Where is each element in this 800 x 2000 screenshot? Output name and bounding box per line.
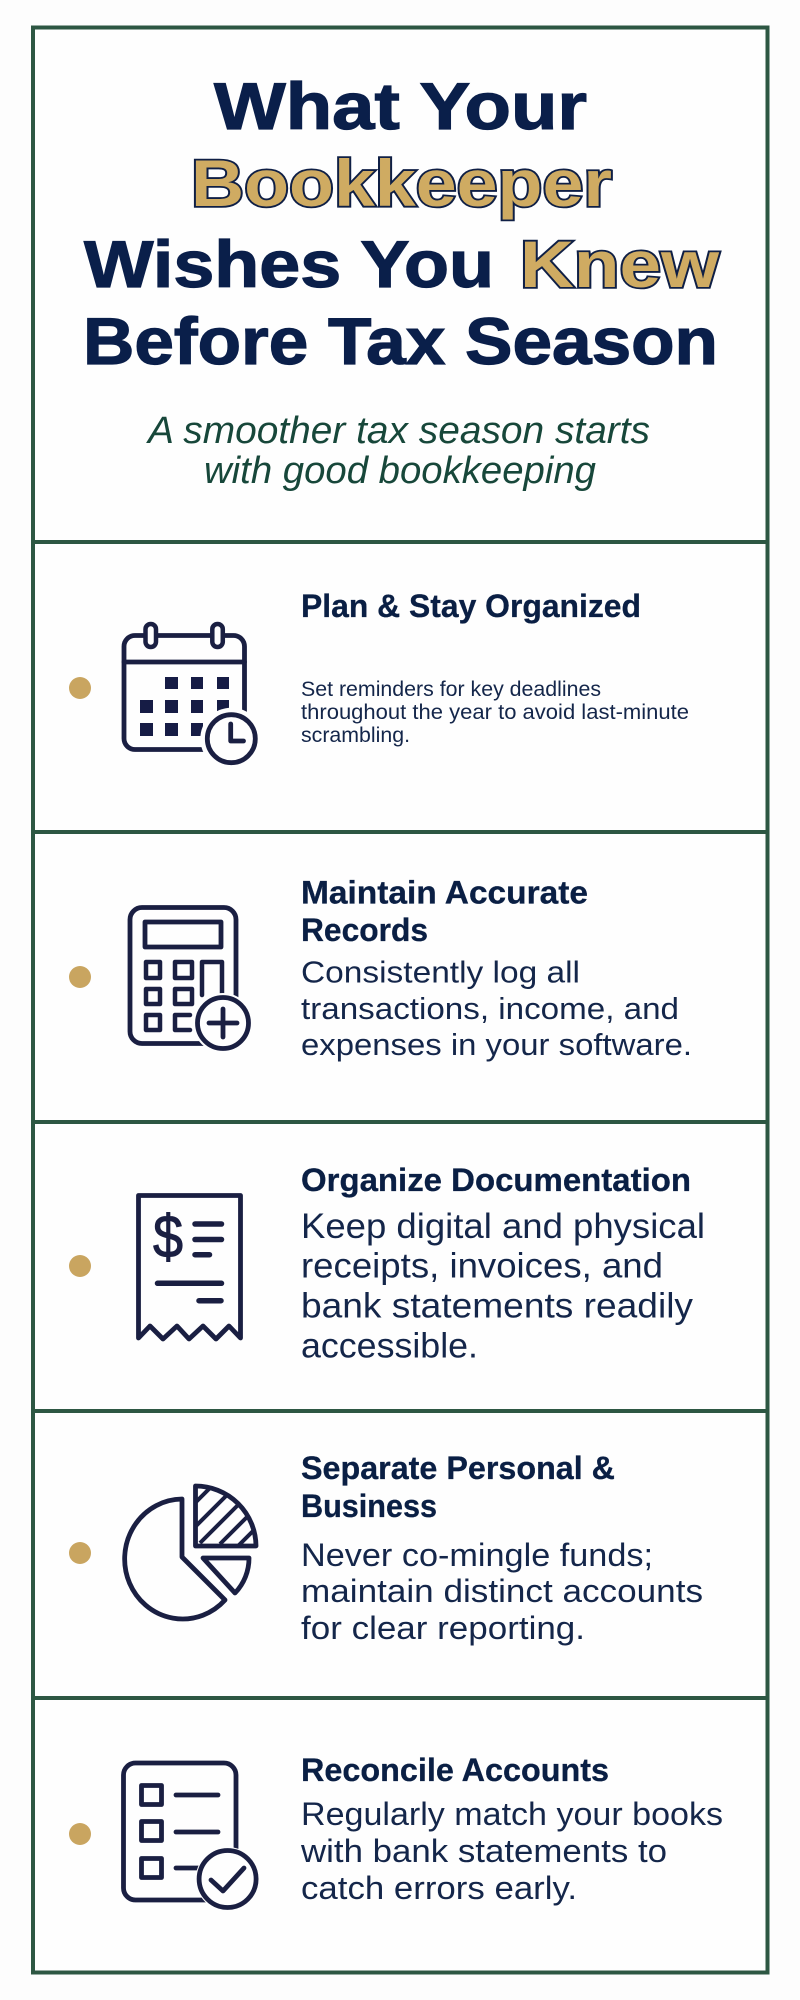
title: Before Tax Season (83, 304, 718, 378)
title (83, 69, 720, 378)
bullet dot (69, 966, 91, 988)
heading: Business (301, 1488, 437, 1524)
bullet dot (69, 1255, 91, 1277)
subtitle: with good bookkeeping (204, 450, 596, 492)
title: Wishes You (84, 227, 494, 301)
body text: accessible. (301, 1326, 478, 1366)
body text: receipts, invoices, and (301, 1246, 663, 1286)
body text: for clear reporting. (301, 1610, 585, 1646)
body text (301, 1207, 705, 1366)
body text: Consistently log all (301, 956, 580, 990)
icon: receipt: $ (153, 1203, 183, 1270)
body text: Keep digital and physical (301, 1207, 705, 1246)
body text: with bank statements to (300, 1833, 667, 1869)
body text (301, 1537, 703, 1646)
icon: calculator with plus (130, 908, 253, 1053)
subtitle (146, 410, 650, 492)
bullet dot (69, 1542, 91, 1564)
heading: Records (301, 912, 428, 948)
body text: scrambling. (301, 724, 410, 747)
icon: pie chart (125, 1486, 256, 1619)
heading: Reconcile Accounts (301, 1752, 609, 1788)
icon: calendar with clock (124, 624, 262, 770)
bullet dot (69, 677, 91, 699)
title: What Your (214, 69, 587, 143)
body text: transactions, income, and (301, 992, 679, 1026)
body text: Set reminders for key deadlines (301, 678, 601, 701)
body text: Regularly match your books (301, 1796, 723, 1832)
title: Bookkeeper (191, 146, 612, 220)
body text: catch errors early. (301, 1870, 577, 1906)
panel: title header (33, 27, 767, 542)
heading (301, 874, 588, 948)
body text (301, 678, 689, 747)
body text: throughout the year to avoid last-minute (301, 701, 689, 724)
heading: Maintain Accurate (301, 874, 588, 910)
icon: receipt (138, 1196, 240, 1339)
heading: Separate Personal & (301, 1450, 615, 1486)
heading: Plan & Stay Organized (301, 588, 641, 624)
icon: checklist with check mark (124, 1763, 260, 1911)
title: Knew (520, 227, 720, 301)
subtitle: A smoother tax season starts (146, 410, 650, 452)
body text (301, 956, 692, 1062)
bullet dot (69, 1823, 91, 1845)
panel: reconcile accounts (33, 1698, 767, 1972)
body text: Never co-mingle funds; (301, 1537, 653, 1573)
body text: maintain distinct accounts (301, 1573, 703, 1609)
body text: expenses in your software. (301, 1028, 692, 1062)
panel: organize documentation (33, 1122, 767, 1411)
panel: plan and stay organized (33, 542, 767, 832)
panel: maintain accurate records (33, 832, 767, 1122)
body text (300, 1796, 723, 1906)
heading (301, 1450, 615, 1524)
body text: bank statements readily (301, 1286, 694, 1326)
heading: Organize Documentation (301, 1162, 691, 1198)
panel: separate personal and business (69, 1455, 702, 1646)
